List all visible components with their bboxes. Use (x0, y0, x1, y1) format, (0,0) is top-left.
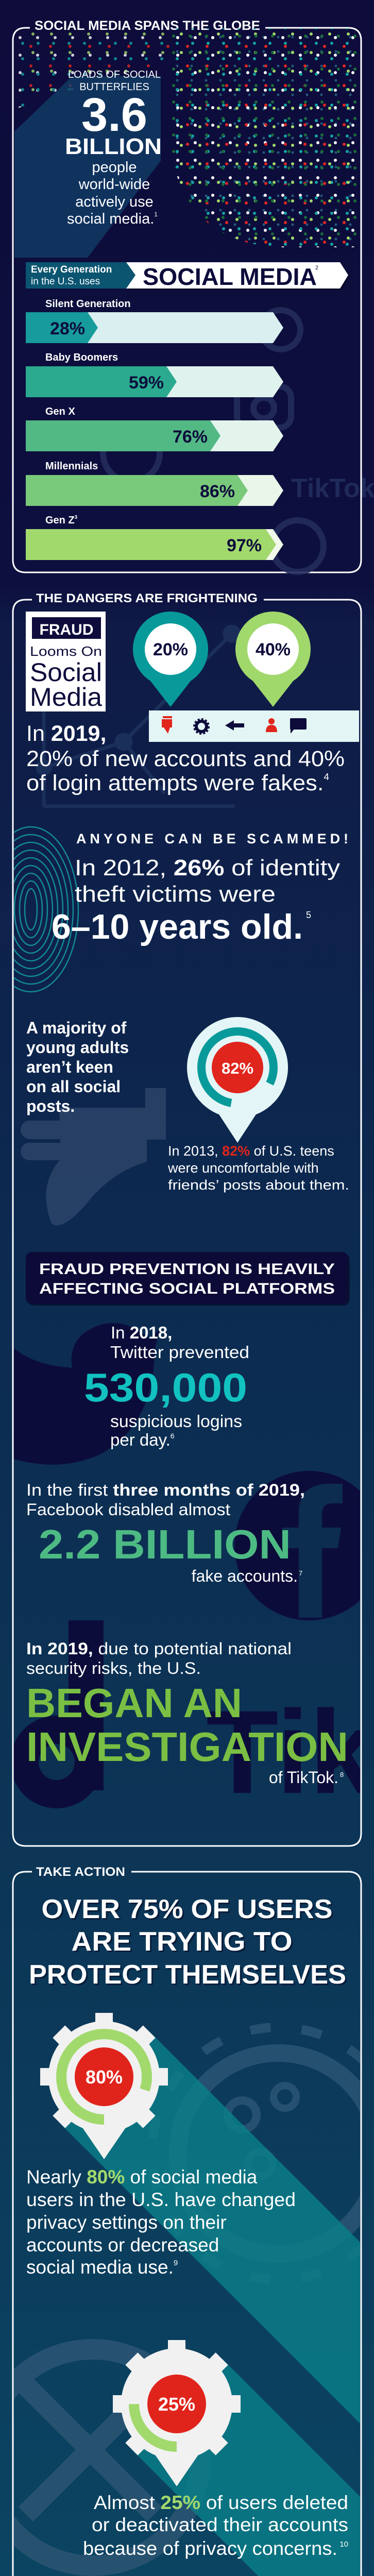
headline: over 75% protect themselves: ARE TRYING TO (71, 1927, 293, 1957)
gear gauge: 25% (113, 2340, 374, 2576)
bar: gen x 76%: 76% (173, 427, 208, 447)
section title: TAKE ACTION (36, 1865, 125, 1879)
frame (13, 1872, 361, 2576)
icon: faint thumbs down (21, 1088, 166, 1225)
icon: person (266, 718, 277, 732)
stat text: 80% changed privacy settings: privacy settings on their (26, 2212, 227, 2233)
stat: young adults not keen: aren’t keen (26, 1058, 113, 1076)
stat: twitter 530,000: suspicious logins (110, 1412, 242, 1431)
stat: facebook 2.2 billion: Facebook disabled almost (26, 1500, 230, 1519)
stat text: 25% deleted accounts: Almost 25% of users deleted (94, 2492, 348, 2513)
stat text: 82% of teens: were uncomfortable with (167, 1160, 319, 1176)
stat: anyone can be scammed (52, 831, 348, 946)
gear gauge: 80%: 80% (86, 2066, 123, 2088)
bar: silent generation 28% (26, 298, 283, 343)
headline: over 75% protect themselves: PROTECT THEMSELVES (29, 1960, 346, 1990)
headline stat: 3.6 billion: people (92, 159, 137, 176)
icon strip (149, 710, 359, 742)
stat: tiktok investigation: security risks, the U.S. (26, 1659, 201, 1677)
section 3: take action (0, 1865, 374, 2576)
stat text: 80% changed privacy settings: social media use. (26, 2257, 174, 2278)
stat: anyone can be scammed: 5 (306, 910, 311, 920)
frame (13, 28, 361, 572)
stat: tiktok investigation: INVESTIGATION (26, 1724, 348, 1770)
headline: over 75% protect themselves: OVER 75% OF USERS (43, 1896, 334, 1926)
headline stat: 3.6 billion: BUTTERFLIES (79, 81, 149, 93)
bar: silent generation 28%: 28% (50, 319, 85, 338)
fraud looms on social media box (26, 612, 106, 711)
bar: silent generation 28%: Silent Generation (45, 298, 131, 310)
stat: anyone can be scammed: In 2012, 26% of identity (75, 855, 340, 880)
heading box: fraud prevention (26, 1252, 350, 1306)
stat: tiktok investigation: BEGAN AN (26, 1680, 242, 1726)
stat: 2019 fake accounts: of login attempts were fakes. (26, 771, 308, 795)
section title: SOCIAL MEDIA SPANS THE GLOBE (35, 19, 260, 33)
bar: gen x 76% (26, 406, 283, 451)
stat text: 82% of teens (167, 1143, 349, 1193)
stat: twitter 530,000: In 2018, (111, 1323, 172, 1342)
bar: gen z 97%: 3 (75, 515, 78, 520)
stat: 2019 fake accounts: 20% of new accounts and 40% (26, 747, 345, 771)
stat: twitter 530,000 (84, 1323, 249, 1449)
long shadow behind headline (14, 76, 161, 258)
bar: millennials 86% (26, 461, 283, 506)
stat: twitter 530,000: per day. (110, 1430, 171, 1449)
bar: baby boomers 59% (26, 352, 283, 397)
stat: young adults not keen (26, 1019, 129, 1115)
stat: twitter 530,000: Twitter prevented (110, 1343, 249, 1362)
headline stat: 3.6 billion: LOADS OF SOCIAL (68, 69, 161, 80)
stat: 2019 fake accounts (26, 721, 345, 795)
fraud looms on social media box: Social (30, 658, 102, 687)
headline: over 75% protect themselves (29, 1894, 348, 1991)
bar: millennials 86%: 86% (200, 482, 235, 501)
icon: gear (194, 719, 209, 734)
stat: tiktok investigation: 8 (340, 1771, 344, 1778)
headline stat: 3.6 billion: world-wide (78, 176, 150, 193)
banner: every generation uses social media: SOCIAL MEDIA (143, 263, 317, 290)
banner: every generation uses social media (26, 262, 350, 290)
headline stat: 3.6 billion: actively use (75, 194, 154, 210)
stat: 2019 fake accounts: In 2019, (26, 721, 106, 746)
section 1: social media spans the globe (13, 19, 374, 572)
icon: arrow (225, 720, 244, 731)
pin: 40%: 40% (256, 640, 291, 659)
stat: facebook 2.2 billion: fake accounts. (192, 1567, 298, 1585)
heading box: fraud prevention: AFFECTING SOCIAL PLATFORMS (39, 1280, 335, 1297)
stat: twitter 530,000: 530,000 (84, 1365, 247, 1410)
headline stat: 3.6 billion: 1 (154, 211, 158, 218)
bar: gen z 97%: 97% (227, 536, 262, 555)
stat: anyone can be scammed: theft victims were (75, 882, 276, 907)
dotted globe (18, 28, 361, 247)
headline stat: 3.6 billion (65, 69, 162, 227)
bar: gen x 76%: Gen X (45, 406, 75, 417)
icon: faint tiktok logo: Tik (206, 1686, 374, 1818)
stat: young adults not keen: posts. (26, 1097, 75, 1115)
bar: gen z 97% (26, 515, 283, 560)
headline: over 75% protect themselves: ARE TRYING TO (73, 1928, 294, 1958)
banner: every generation uses social media: 2 (315, 265, 318, 271)
gear gauge: 25%: 25% (158, 2394, 195, 2415)
icon: faint facebook logo (234, 1471, 374, 1620)
section 1: social media spans the globe: TikTok (291, 473, 374, 503)
bar: baby boomers 59%: Baby Boomers (45, 352, 118, 363)
stat: 2019 fake accounts: 4 (324, 772, 329, 782)
stat text: 25% deleted accounts: 10 (339, 2540, 348, 2549)
target pin: 82%: 82% (222, 1059, 253, 1077)
stat: facebook 2.2 billion: 7 (299, 1569, 302, 1577)
fraud looms on social media box: FRAUD (39, 621, 94, 638)
section 2: the dangers are frightening (0, 591, 374, 1846)
pin: 20%: 20% (153, 640, 188, 659)
faint social icons background (103, 310, 324, 572)
faint background gears (0, 2027, 374, 2566)
headline stat: 3.6 billion: social media. (67, 211, 154, 227)
stat text: 25% deleted accounts: because of privacy concerns. (83, 2538, 337, 2559)
headline: over 75% protect themselves: PROTECT THEMSELVES (30, 1961, 348, 1991)
icon: faint tiktok logo (10, 1620, 374, 1818)
banner: every generation uses social media: in the U.S. uses (31, 276, 100, 287)
bar: millennials 86%: Millennials (45, 461, 98, 472)
fraud looms on social media box: Looms On (30, 643, 102, 659)
section title: THE DANGERS ARE FRIGHTENING (36, 591, 258, 605)
stat: young adults not keen: young adults (26, 1038, 129, 1057)
stat: twitter 530,000: 6 (171, 1432, 175, 1440)
stat text: 82% of teens: friends’ posts about them. (168, 1177, 349, 1193)
headline stat: 3.6 billion: BILLION (65, 134, 162, 159)
bar: gen z 97%: Gen Z (45, 515, 75, 526)
bar: baby boomers 59%: 59% (129, 373, 164, 393)
fraud looms on social media box: Media (30, 683, 102, 711)
icon: thumbs down (162, 716, 172, 734)
headline stat: 3.6 billion: 3.6 (81, 89, 147, 141)
stat text: 80% changed privacy settings: accounts or decreased (26, 2234, 219, 2256)
stat: young adults not keen: A majority of (26, 1019, 127, 1037)
stat: facebook 2.2 billion (26, 1481, 305, 1585)
icon: faint twitter bird (10, 1323, 160, 1465)
stat text: 25% deleted accounts: or deactivated their accounts (92, 2514, 348, 2535)
stat text: 80% changed privacy settings: 9 (174, 2259, 178, 2267)
stat: anyone can be scammed: ANYONE CAN BE SCAMMED! (76, 831, 348, 846)
stat text: 80% changed privacy settings (26, 2166, 296, 2278)
icon: fingerprint (14, 826, 79, 992)
stat text: 25% deleted accounts (83, 2492, 348, 2559)
frame (13, 600, 361, 1846)
stat: tiktok investigation (26, 1639, 348, 1787)
stat: tiktok investigation: of TikTok. (269, 1768, 338, 1787)
banner: every generation uses social media: Every Generation (31, 264, 112, 275)
headline: over 75% protect themselves: OVER 75% OF USERS (41, 1894, 333, 1924)
heading box: fraud prevention: FRAUD PREVENTION IS HEAVILY (39, 1261, 335, 1278)
faint network background (38, 626, 239, 806)
stat text: 80% changed privacy settings: users in the U.S. have changed (26, 2189, 296, 2210)
stat: young adults not keen: on all social (26, 1077, 121, 1096)
pin: 40% (235, 612, 311, 707)
stat: facebook 2.2 billion: In the first three months of 2019, (26, 1481, 305, 1499)
icon: chat bubble (290, 718, 307, 734)
stat: anyone can be scammed: 6–10 years old. (52, 907, 303, 946)
stat: tiktok investigation: In 2019, due to potential national (26, 1639, 292, 1658)
stat text: 80% changed privacy settings: Nearly 80% of social media (26, 2166, 258, 2188)
stat text: 82% of teens: In 2013, 82% of U.S. teens (168, 1143, 334, 1159)
gear gauge: 80% (40, 2013, 374, 2431)
target pin: 82% (187, 1017, 288, 1143)
pin: 20% (133, 612, 208, 707)
stat: facebook 2.2 billion: 2.2 BILLION (39, 1521, 291, 1567)
